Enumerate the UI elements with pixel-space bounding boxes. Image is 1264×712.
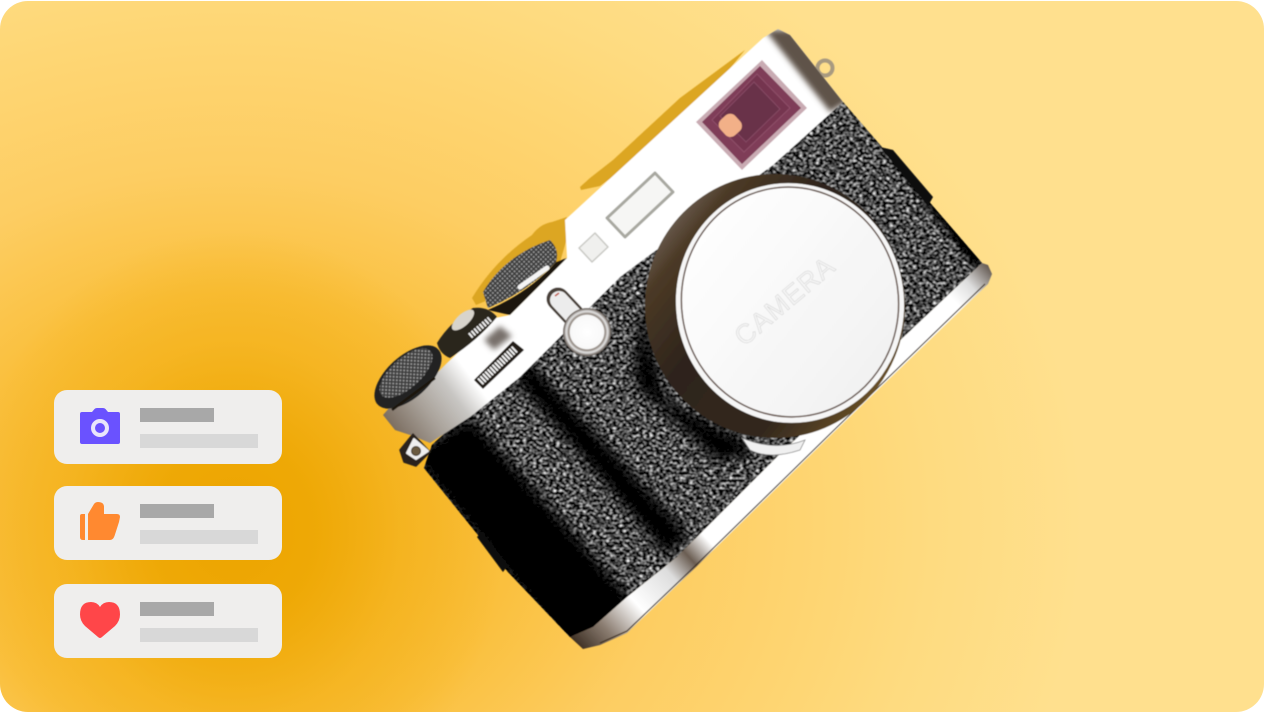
card: camera item (54, 390, 282, 464)
shutter button (563, 308, 611, 356)
exposure wheel (475, 342, 523, 388)
icon: thumbs up (80, 502, 120, 540)
lens cap assembly (645, 168, 920, 438)
bottom port (477, 532, 508, 572)
lower lug (400, 434, 430, 466)
icon: camera (80, 408, 120, 444)
icon: heart (80, 602, 120, 638)
heading placeholder bar (140, 408, 214, 422)
left knurled dial (363, 334, 453, 420)
heading placeholder bar (140, 602, 214, 616)
strip shadow edge (600, 284, 985, 643)
right side controls (880, 147, 933, 206)
shutter lever (555, 293, 573, 315)
lens cap face (667, 173, 913, 431)
text placeholder bar (140, 628, 258, 642)
cap engraving: CAMERA (729, 251, 841, 352)
black body with leather texture (410, 95, 992, 655)
text placeholder bar (140, 530, 258, 544)
gold reflection along top edge (472, 50, 745, 305)
strap lug top right (818, 60, 832, 76)
viewfinder window (696, 60, 807, 170)
plate dark end edge (484, 30, 850, 350)
lens outer ring (645, 174, 905, 438)
card: heart item (54, 584, 282, 658)
centre chrome stack dial (437, 306, 497, 358)
card: thumbs up item (54, 486, 282, 560)
bottom silver strip (570, 263, 992, 649)
heading placeholder bar (140, 504, 214, 518)
lens clip foot (742, 438, 805, 455)
photo: tilted silver and black camera (374, 28, 992, 650)
small square button (579, 233, 608, 262)
viewfinder orange spot (716, 111, 745, 140)
lens silver rim (660, 168, 920, 438)
top knurled dial (483, 240, 567, 315)
frame counter window (607, 173, 673, 237)
text placeholder bar (140, 434, 258, 448)
silver top plate (383, 29, 843, 443)
